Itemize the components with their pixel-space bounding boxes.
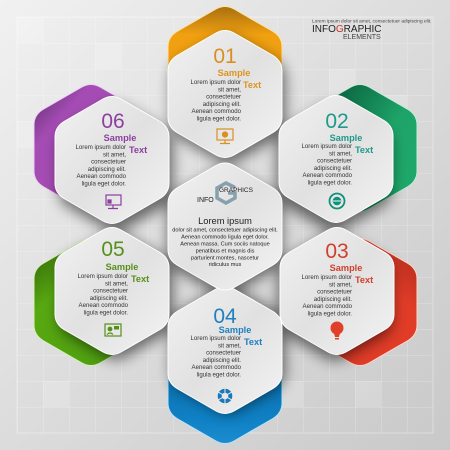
center body: parturient montes, nascetur xyxy=(191,256,259,262)
number 04: 04 xyxy=(213,305,237,328)
icon: monitor xyxy=(217,129,233,144)
heading 03: Text xyxy=(355,275,373,285)
center heading: Lorem ipsum xyxy=(198,216,252,226)
heading 02: Text xyxy=(355,145,373,155)
heading 06 xyxy=(104,133,147,155)
body 04: Lorem ipsum dolor xyxy=(191,335,241,342)
panel 05 xyxy=(55,228,169,354)
body 01: Lorem ipsum dolor xyxy=(191,79,241,86)
center logo: INFO xyxy=(197,197,214,204)
body 03: sit amet, xyxy=(329,281,352,288)
panel 06 xyxy=(55,96,169,224)
body 02: Aenean commodo xyxy=(303,172,353,179)
heading 04 xyxy=(219,325,262,347)
center body: penatibus et magnis dis xyxy=(196,248,255,254)
panel 03 xyxy=(280,228,394,354)
body 02: sit amet, xyxy=(329,150,352,157)
panel 04 xyxy=(168,286,282,414)
heading 01: Text xyxy=(243,80,261,90)
body 05: adipiscing elit. xyxy=(90,295,128,302)
body 06: Lorem ipsum dolor xyxy=(76,144,126,151)
body 03: Aenean commodo xyxy=(303,303,353,310)
title block: Lorem ipsum dolor sit amet, consectetuer adipiscing elit. xyxy=(312,18,431,24)
heading 06: Sample xyxy=(104,133,136,143)
body 01: ligula eget dolor. xyxy=(197,116,241,122)
icon: light bulb xyxy=(330,322,344,340)
panel 01 xyxy=(168,30,282,158)
body 06: Aenean commodo xyxy=(77,173,127,180)
body 02: ligula eget dolor. xyxy=(308,180,352,186)
heading 04: Text xyxy=(244,337,262,347)
body 05: ligula eget dolor. xyxy=(84,310,128,316)
body 02: consectetuer xyxy=(317,158,352,165)
body 01: Aenean commodo xyxy=(192,108,242,115)
heading 05: Text xyxy=(131,274,149,284)
body 02: adipiscing elit. xyxy=(314,165,352,172)
panel 02 xyxy=(279,96,393,222)
center body: dolor sit amet, consectetuer adipiscing elit. xyxy=(172,228,278,234)
body 03: adipiscing elit. xyxy=(314,296,352,303)
heading 01 xyxy=(218,68,261,90)
heading 04: Sample xyxy=(219,325,251,335)
center logo: GRAPHICS xyxy=(219,187,254,194)
number 05: 05 xyxy=(101,238,125,261)
icon: desktop chart xyxy=(106,195,121,208)
center body: Aenean commodo ligula eget dolor. xyxy=(181,234,269,240)
heading 03 xyxy=(330,263,373,285)
body 06: ligula eget dolor. xyxy=(82,180,126,188)
body 06: consectetuer xyxy=(91,159,126,166)
heading 02: Sample xyxy=(330,133,362,143)
center panel xyxy=(168,163,282,290)
body 05: sit amet, xyxy=(105,280,128,287)
heading 05: Sample xyxy=(106,262,138,272)
body 04: consectetuer xyxy=(206,350,241,357)
body 04: sit amet, xyxy=(218,342,241,349)
body 03: ligula eget dolor. xyxy=(308,310,352,318)
title block: ELEMENTS xyxy=(343,34,381,41)
body 05: Lorem ipsum dolor xyxy=(78,273,128,280)
heading 01: Sample xyxy=(218,68,250,78)
body 01: adipiscing elit. xyxy=(203,101,241,108)
icon: camera shutter xyxy=(218,388,232,404)
body 06: adipiscing elit. xyxy=(88,166,126,173)
heading 05 xyxy=(106,262,149,284)
number 02: 02 xyxy=(325,110,349,133)
body 05: Aenean commodo xyxy=(79,302,129,309)
body 01: consectetuer xyxy=(206,94,241,101)
center body: ridiculus mus xyxy=(209,262,242,268)
body 01: sit amet, xyxy=(218,86,241,93)
title block xyxy=(312,18,431,41)
heading 03: Sample xyxy=(330,263,362,273)
body 02: Lorem ipsum dolor xyxy=(302,143,352,150)
body 04: adipiscing elit. xyxy=(203,357,241,364)
body 06: sit amet, xyxy=(103,151,126,158)
center body: Aenean massa. Cum sociis natoque xyxy=(180,242,270,248)
icon: picture frame xyxy=(105,324,121,336)
body 05: consectetuer xyxy=(93,288,128,295)
icon: gear badge xyxy=(330,194,344,208)
heading 02 xyxy=(330,133,373,155)
center logo xyxy=(197,183,254,204)
hexagon shadows xyxy=(59,36,392,414)
body 04: Aenean commodo xyxy=(192,364,242,371)
heading 06: Text xyxy=(129,145,147,155)
number 03: 03 xyxy=(325,240,349,263)
title block: INFOGRAPHIC xyxy=(312,24,381,35)
body 03: Lorem ipsum dolor xyxy=(302,274,352,281)
number 01: 01 xyxy=(213,45,237,68)
number 06: 06 xyxy=(101,110,125,133)
body 03: consectetuer xyxy=(317,289,352,296)
body 04: ligula eget dolor. xyxy=(197,372,241,378)
